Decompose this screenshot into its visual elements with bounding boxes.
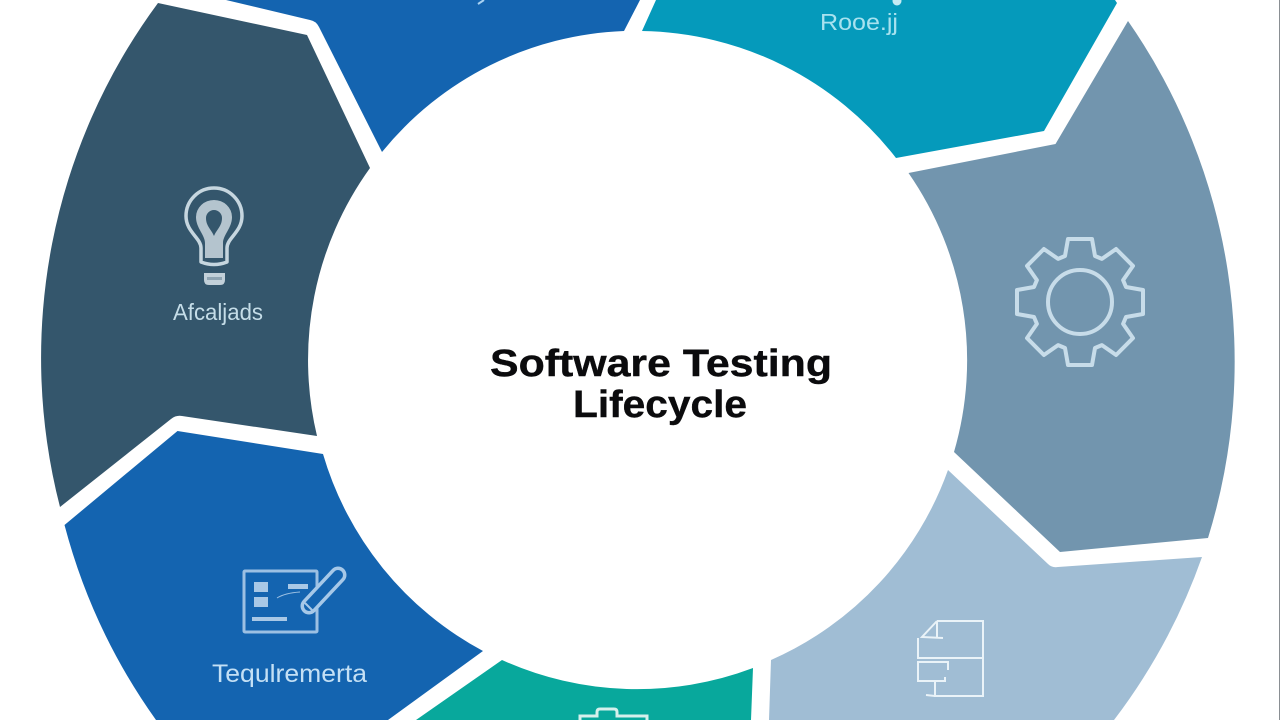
icon: checklist and pen [244, 571, 338, 632]
title: Lifecycle [573, 384, 747, 426]
panel: top blue segment [226, 0, 640, 152]
panel: document segment [769, 470, 1202, 720]
panel: top teal segment [642, 0, 1117, 158]
icon: cropped marker [892, 0, 902, 6]
label: analysis: Afcaljads [173, 299, 263, 325]
title [490, 343, 832, 426]
icon: gear [1017, 239, 1143, 365]
icon: light bulb [186, 188, 242, 285]
cropped label fragment [478, 0, 484, 4]
icon: cropped toolkit [580, 709, 647, 720]
title: Software Testing [490, 343, 832, 385]
panel: requirements segment [64, 431, 483, 720]
panel: bottom green segment [416, 660, 753, 720]
label: top teal segment: Rooe.jj [820, 9, 898, 35]
icon: document [917, 621, 983, 696]
panel: analysis segment [41, 3, 370, 507]
panel: gear segment [908, 21, 1235, 552]
label: requirements: Tequlremerta [212, 660, 367, 688]
